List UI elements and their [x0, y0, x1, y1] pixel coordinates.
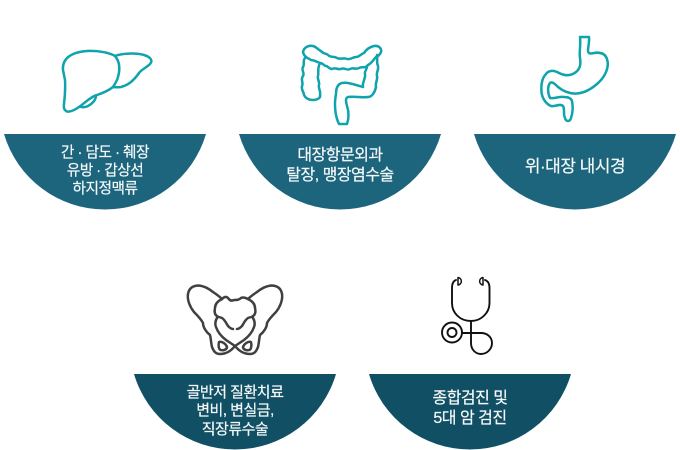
icon: stethoscope	[442, 278, 492, 354]
semicircle: liver	[4, 134, 206, 210]
label: endoscopy: 위·대장 내시경	[525, 157, 625, 176]
label: liver: 간 · 담도 · 췌장	[61, 144, 149, 161]
icon: stomach	[541, 37, 608, 121]
label: pelvic: 골반저 질환치료	[187, 384, 284, 401]
label: liver: 하지정맥류	[72, 180, 138, 197]
semicircle: endoscopy	[474, 134, 676, 210]
panel: endoscopy service	[474, 37, 676, 210]
panel: liver service	[4, 51, 206, 210]
icon: liver	[63, 51, 151, 112]
semicircle: colorectal	[239, 134, 441, 210]
label: pelvic: 직장류수술	[202, 421, 268, 438]
label: checkup: 5대 암 검진	[433, 409, 507, 427]
panel: colorectal service	[239, 46, 441, 210]
label: pelvic: 변비, 변실금,	[196, 402, 274, 419]
label: colorectal: 대장항문외과	[297, 146, 383, 164]
label: colorectal: 탈장, 맹장염수술	[286, 166, 394, 184]
semicircle: pelvic	[134, 374, 336, 450]
icon: pelvis	[188, 286, 282, 354]
icon: colon	[302, 46, 381, 124]
semicircle: checkup	[369, 374, 571, 450]
panel: checkup service	[369, 278, 571, 450]
label: liver: 유방 · 갑상선	[67, 162, 143, 179]
panel: pelvic service	[134, 286, 336, 450]
label: checkup: 종합검진 및	[432, 389, 508, 407]
